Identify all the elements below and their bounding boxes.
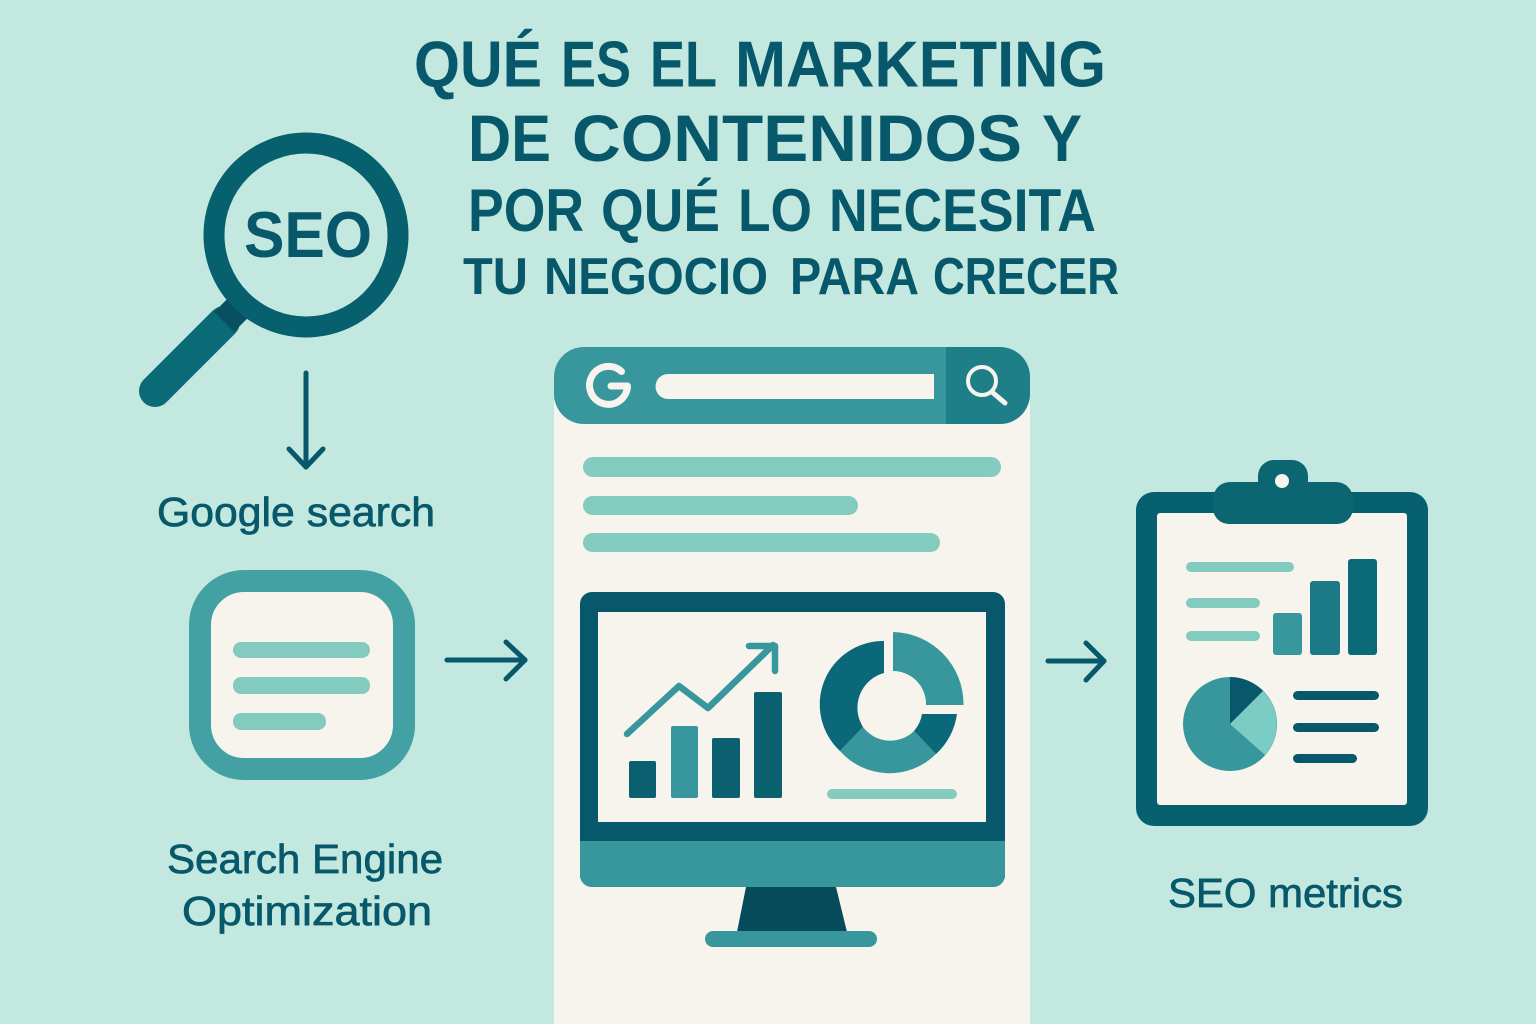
result text lines [583, 457, 1001, 552]
title: Y [1042, 101, 1082, 175]
clipboard clip [1213, 460, 1353, 524]
label: Search Engine Optimization [167, 836, 443, 934]
icon: document card [200, 581, 404, 769]
title: QUÉ [414, 28, 542, 100]
search bar [554, 347, 1030, 424]
label: Search Engine Optimization: Optimization [182, 888, 432, 934]
title: QUÉ [601, 177, 720, 244]
title: LO [738, 177, 812, 244]
title: POR [468, 177, 584, 244]
label: Search Engine Optimization: Search Engine [167, 836, 443, 882]
trend arrow [627, 645, 775, 734]
report legend lines [1293, 691, 1379, 763]
icon: clipboard report [1136, 460, 1428, 826]
title: MARKETING [735, 28, 1106, 100]
bar chart [629, 692, 782, 798]
donut chart [820, 632, 964, 773]
title: TU [463, 248, 528, 306]
title [414, 28, 1119, 306]
report bar chart [1273, 559, 1377, 655]
arrow: card to page [447, 642, 525, 679]
icon: SEO magnifying glass: SEO [244, 198, 372, 271]
title: NEGOCIO [544, 248, 768, 306]
label: SEO metrics: SEO metrics [1168, 870, 1403, 916]
title: EL [650, 28, 717, 100]
arrow: page to clipboard [1048, 643, 1104, 680]
report lines [1186, 562, 1294, 641]
arrow: magnifier to Google search [289, 373, 323, 467]
icon: SEO magnifying glass [155, 143, 398, 391]
title: ES [561, 28, 631, 100]
report pie chart [1183, 677, 1277, 771]
title: CRECER [933, 248, 1119, 306]
title: PARA [790, 248, 919, 306]
panel: search results page [554, 347, 1030, 1024]
title: DE [468, 101, 551, 175]
monitor with charts [580, 592, 1005, 947]
title: CONTENIDOS [572, 101, 1022, 175]
label: Google search: Google search [157, 489, 435, 535]
title: NECESITA [829, 177, 1096, 244]
